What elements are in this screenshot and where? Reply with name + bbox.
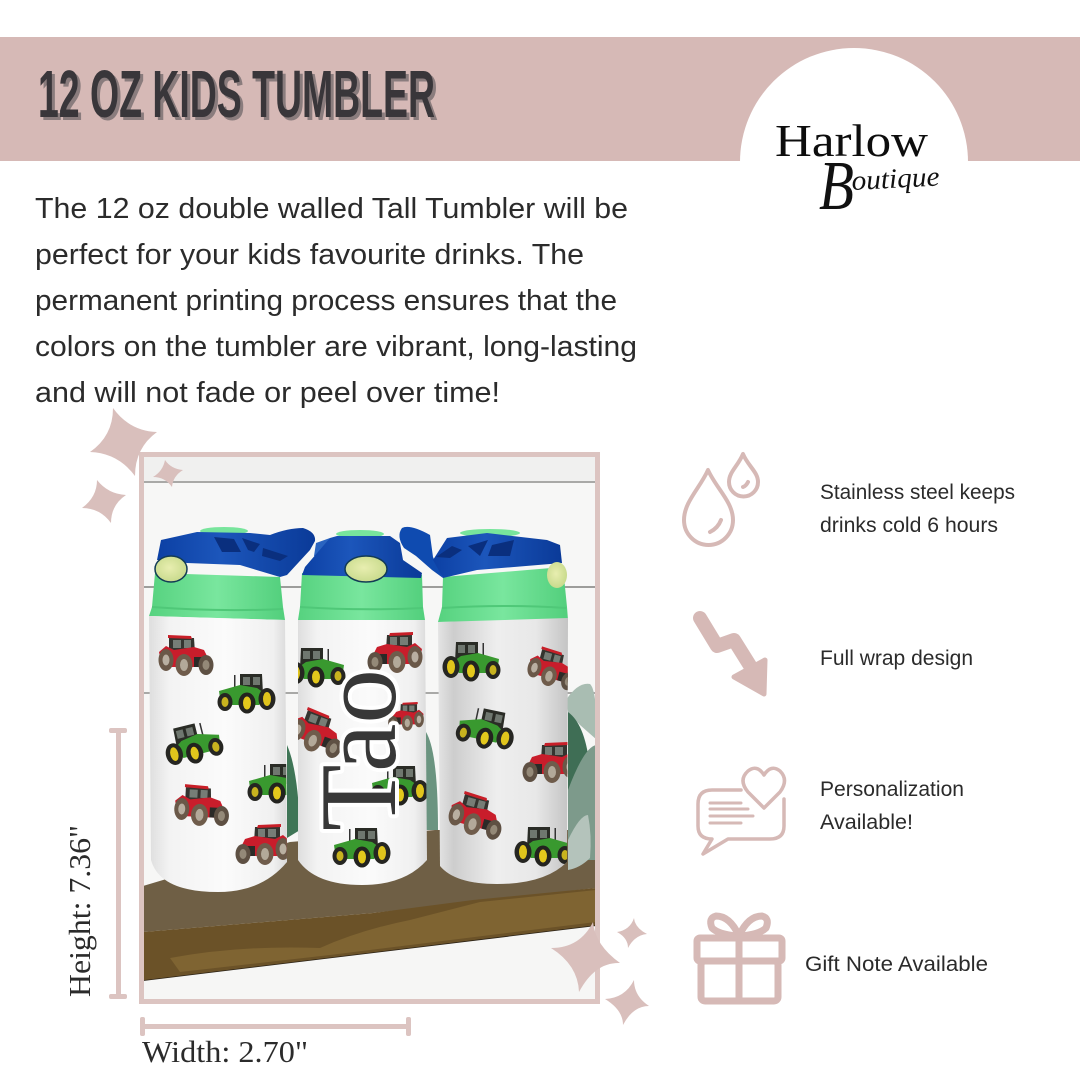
collar bbox=[149, 573, 285, 620]
shiplap wall background bbox=[144, 457, 595, 886]
green top bbox=[460, 529, 520, 537]
width label: Width: 2.70" bbox=[142, 1034, 308, 1069]
title: 12 OZ KIDS TUMBLER bbox=[41, 60, 438, 135]
title bbox=[38, 57, 438, 135]
body bbox=[438, 618, 568, 884]
back loop bbox=[314, 538, 330, 558]
logo: Harlow Boutique on white arch: outique bbox=[851, 161, 940, 197]
photo frame bbox=[142, 454, 598, 1002]
logo: Harlow Boutique on white arch: B bbox=[819, 147, 854, 224]
sparkles top left bbox=[82, 408, 183, 523]
tractors bbox=[158, 635, 287, 865]
left tumbler bbox=[149, 527, 315, 892]
icon: water drops bbox=[684, 454, 758, 545]
icon: gift box bbox=[697, 916, 782, 1001]
height dimension bar bbox=[109, 728, 127, 999]
description text bbox=[35, 193, 637, 409]
button bbox=[155, 556, 187, 582]
header band bbox=[0, 37, 1080, 161]
lid bbox=[302, 536, 422, 578]
tractors bbox=[298, 632, 426, 868]
description text: The 12 oz double walled Tall Tumbler will be bbox=[35, 193, 628, 225]
personalised name: Tao bbox=[298, 669, 419, 831]
feature: gift note: Gift Note Available bbox=[805, 953, 988, 976]
body bbox=[298, 620, 427, 885]
tractors bbox=[442, 642, 582, 866]
right tumbler bbox=[433, 529, 582, 884]
collar bbox=[438, 567, 568, 622]
feature: full wrap: Full wrap design bbox=[820, 647, 973, 670]
right tumbler spout behind middle bbox=[399, 527, 443, 578]
feature: personalization: Personalization bbox=[820, 778, 964, 801]
feature: stainless steel: drinks cold 6 hours bbox=[820, 514, 998, 537]
height label: Height: 7.36" bbox=[62, 825, 97, 997]
button bbox=[547, 562, 567, 588]
feature: stainless steel bbox=[820, 481, 1015, 537]
logo: Harlow Boutique on white arch bbox=[740, 48, 968, 224]
product photo bbox=[142, 454, 598, 1002]
feature: stainless steel: Stainless steel keeps bbox=[820, 481, 1015, 504]
icon: zigzag arrow bbox=[700, 618, 765, 694]
feature: personalization: Available! bbox=[820, 811, 913, 834]
logo: Harlow Boutique on white arch: Harlow bbox=[775, 115, 929, 166]
green top bbox=[336, 530, 384, 538]
body bbox=[149, 616, 287, 892]
plant behind tumblers bbox=[287, 684, 597, 870]
lid with spout bbox=[157, 528, 315, 577]
description text: perfect for your kids favourite drinks. The bbox=[35, 239, 584, 271]
sparkles bottom right bbox=[551, 918, 649, 1025]
green top bbox=[200, 527, 248, 535]
description text: permanent printing process ensures that the bbox=[35, 285, 617, 317]
width dimension bar bbox=[140, 1017, 411, 1036]
lid bbox=[433, 533, 562, 578]
middle tumbler bbox=[298, 530, 427, 885]
icon: speech bubble with heart bbox=[698, 768, 784, 854]
feature: personalization bbox=[820, 778, 964, 834]
description text: and will not fade or peel over time! bbox=[35, 377, 500, 409]
description text: colors on the tumbler are vibrant, long-lasting bbox=[35, 331, 637, 363]
title: 12 OZ KIDS TUMBLER bbox=[38, 57, 435, 132]
wooden shelf bbox=[143, 830, 596, 981]
button bbox=[345, 556, 387, 582]
collar bbox=[298, 573, 425, 620]
